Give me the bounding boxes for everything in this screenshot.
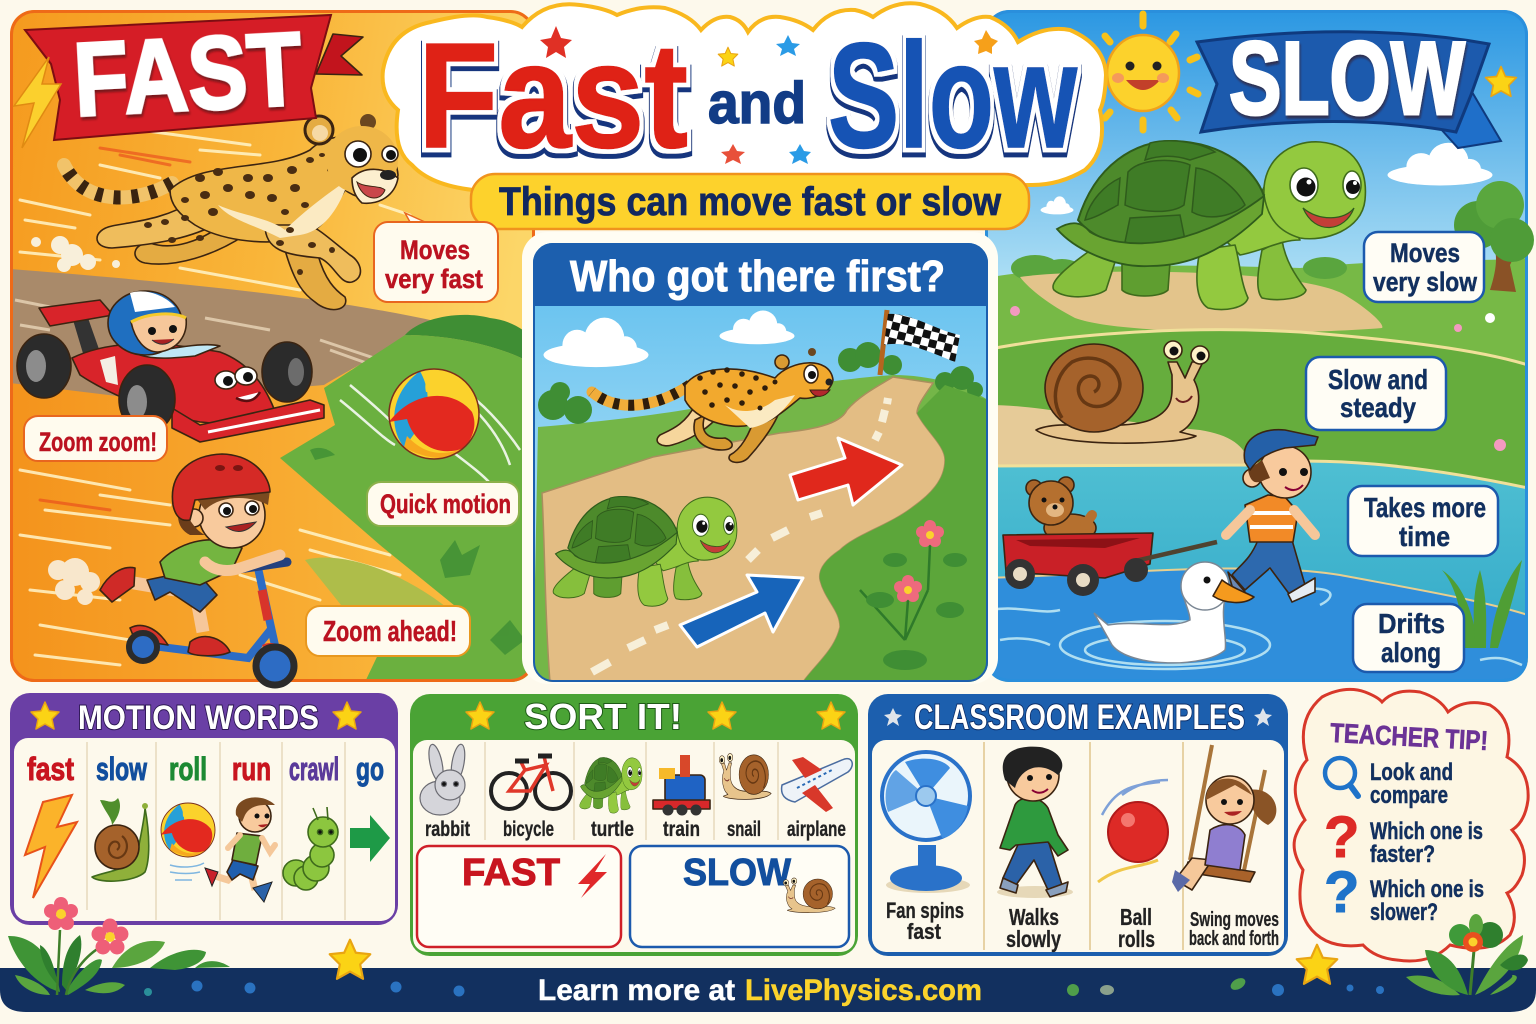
words: roll: [169, 751, 207, 787]
icon: sort turtle: [580, 757, 642, 813]
icon: snail: [1036, 341, 1209, 443]
icon: turtle: [1053, 141, 1365, 310]
callout: quick motion: [367, 482, 519, 526]
label: fan: fast: [907, 919, 942, 944]
icon: train: [653, 755, 710, 816]
plant: bottom left: [8, 897, 230, 995]
label: ball rolls: Ball: [1120, 904, 1152, 930]
words: fast: [27, 751, 74, 787]
clouds: [544, 310, 794, 367]
panel header: Who got there first?: [570, 252, 945, 301]
plant: bottom right: [1406, 914, 1528, 995]
tip text 3: slower?: [1370, 899, 1438, 926]
icon: reeds: [1442, 560, 1522, 648]
callout: takes more time: time: [1399, 521, 1450, 552]
callout: slow and steady: steady: [1340, 392, 1416, 423]
labels: [425, 818, 846, 841]
callout: slow and steady: Slow and: [1328, 364, 1428, 395]
icon: fan: [882, 752, 970, 893]
callout: takes more time: Takes more: [1364, 492, 1486, 523]
icon: dust puff 2: [48, 558, 100, 605]
icon: dust puff: [31, 236, 120, 272]
tip text 2: faster?: [1370, 841, 1435, 868]
icon: caterpillar: [283, 807, 338, 890]
callout: moves very fast: [374, 213, 498, 302]
tip text 2: Which one is: [1370, 818, 1483, 845]
icon: rabbit: [420, 743, 467, 815]
panel: motion words: [10, 693, 398, 925]
subtitle pill: Things can move fast or slow: [499, 180, 1002, 224]
label: walks slowly: Walks: [1009, 904, 1059, 930]
heading: teacher tip: TEACHER TIP!: [1329, 718, 1489, 756]
words: [27, 751, 384, 787]
icon: cheetah: [64, 114, 398, 310]
header stars: [466, 702, 845, 729]
icon: bicycle: [491, 756, 571, 809]
icon: red question: ?: [1324, 805, 1359, 870]
header text: SORT IT!: [524, 696, 682, 737]
labels: turtle: [591, 818, 634, 841]
panel: classroom examples: [868, 694, 1288, 956]
title: and: and: [708, 71, 806, 136]
icon: blue question: ?: [1324, 860, 1359, 925]
icon: lightning: [25, 795, 77, 898]
tip text 2: [1370, 818, 1483, 868]
icon: small cloud: [1040, 196, 1074, 214]
callout: zoom ahead: Zoom ahead!: [323, 616, 457, 648]
box: slow: SLOW: [683, 852, 791, 894]
hills: [533, 375, 988, 682]
grass: [280, 335, 535, 682]
panel: who got there first: [522, 232, 998, 684]
footer: [0, 968, 1536, 1012]
banner: SLOW: SLOW: [1229, 21, 1466, 137]
icon: race car: [17, 291, 324, 442]
icon: ball word: [161, 803, 215, 880]
label: fan: Fan spins: [886, 898, 964, 923]
words: crawl: [289, 751, 339, 787]
icon: cloud: [1388, 143, 1492, 185]
header text: CLASSROOM EXAMPLES: [914, 698, 1245, 737]
box: fast: FAST: [462, 852, 560, 894]
box: slow: [630, 846, 849, 947]
icon: small turtle: [553, 497, 737, 606]
box: fast: [417, 846, 621, 947]
footer: LivePhysics.com: [745, 974, 982, 1007]
icon: tree: [1454, 181, 1534, 292]
icon: red ball: [1098, 780, 1168, 882]
icon: beach ball: [389, 369, 479, 459]
callout: moves very slow: Moves: [1390, 238, 1460, 268]
callout: drifts along: Drifts: [1378, 608, 1445, 639]
label: ball rolls: [1118, 904, 1155, 952]
icon: sun: [1084, 14, 1198, 130]
icon: star footer left: [330, 940, 370, 979]
tip text 1: compare: [1370, 782, 1448, 809]
label: walks slowly: [1006, 904, 1061, 952]
icon: wagon with teddy bear: [1003, 477, 1217, 596]
panel: fast scene: [10, 10, 535, 682]
icon: boy on scooter: [100, 454, 294, 685]
road: [10, 269, 439, 400]
callout: zoom ahead: [306, 606, 470, 656]
panel: slow scene: [985, 10, 1528, 682]
footer: Learn more at: [538, 974, 735, 1007]
panel: sort it: [410, 694, 858, 956]
labels: rabbit: [425, 818, 470, 841]
icon: runner: [205, 797, 275, 902]
callout: moves very fast: Moves: [400, 235, 470, 265]
labels: bicycle: [503, 818, 554, 841]
header stars: [884, 708, 1272, 726]
callout: quick motion: Quick motion: [380, 489, 511, 519]
icon: checkered flag: [880, 310, 960, 375]
tip text 1: Look and: [1370, 759, 1453, 786]
decorative stars: [540, 26, 998, 164]
tip text 3: Which one is: [1370, 876, 1484, 903]
label: fan: [886, 898, 964, 944]
callout: zoom zoom: Zoom zoom!: [39, 427, 157, 457]
callout: drifts along: along: [1381, 637, 1441, 668]
labels: airplane: [787, 818, 846, 841]
label: swing: back and forth: [1189, 928, 1279, 950]
icon: star footer right: [1297, 945, 1337, 984]
bubble: teacher tip: [1294, 689, 1528, 961]
callout: moves very slow: [1364, 232, 1484, 302]
labels: snail: [727, 818, 761, 841]
icon: magnifier: [1325, 758, 1358, 796]
words: run: [232, 751, 271, 787]
icon: lightning left: [14, 57, 61, 148]
icon: snail word: [92, 798, 149, 881]
callout: zoom zoom: [24, 416, 167, 461]
header stars: [31, 702, 361, 729]
label: swing: Swing moves: [1190, 909, 1279, 931]
callout: drifts along: [1353, 604, 1464, 672]
arrow: red: [790, 438, 902, 505]
icon: girl on swing: [1172, 745, 1276, 892]
label: walks slowly: slowly: [1006, 926, 1061, 952]
labels: train: [663, 818, 700, 841]
callout: takes more time: [1348, 486, 1498, 556]
banner: FAST: FAST: [71, 11, 305, 139]
icon: airplane: [782, 757, 852, 812]
winding road: [542, 377, 945, 682]
title block: [383, 3, 1106, 190]
tip text 3: [1370, 876, 1484, 926]
icon: boy pulling wagon: [1226, 430, 1318, 602]
tip text 1: [1370, 759, 1453, 809]
label: ball rolls: rolls: [1118, 926, 1155, 952]
title: Fast: Fast: [418, 11, 688, 179]
callout: moves very slow: very slow: [1373, 267, 1478, 297]
icon: small cheetah: [592, 348, 833, 462]
header text: MOTION WORDS: [78, 699, 319, 737]
label: swing: [1189, 909, 1279, 950]
callout: moves very fast: very fast: [385, 264, 483, 294]
callout: slow and steady: [1306, 357, 1446, 430]
words: go: [356, 751, 384, 787]
arrow: blue: [680, 575, 803, 647]
icon: green arrow: [350, 815, 390, 862]
icon: star right: [1486, 67, 1516, 96]
title: Slow: Slow: [828, 12, 1077, 179]
icon: walking boy: [997, 747, 1073, 898]
icon: sort snail: [719, 753, 771, 799]
icon: duck: [1094, 562, 1254, 663]
words: slow: [96, 751, 147, 787]
flowers: [860, 520, 967, 670]
